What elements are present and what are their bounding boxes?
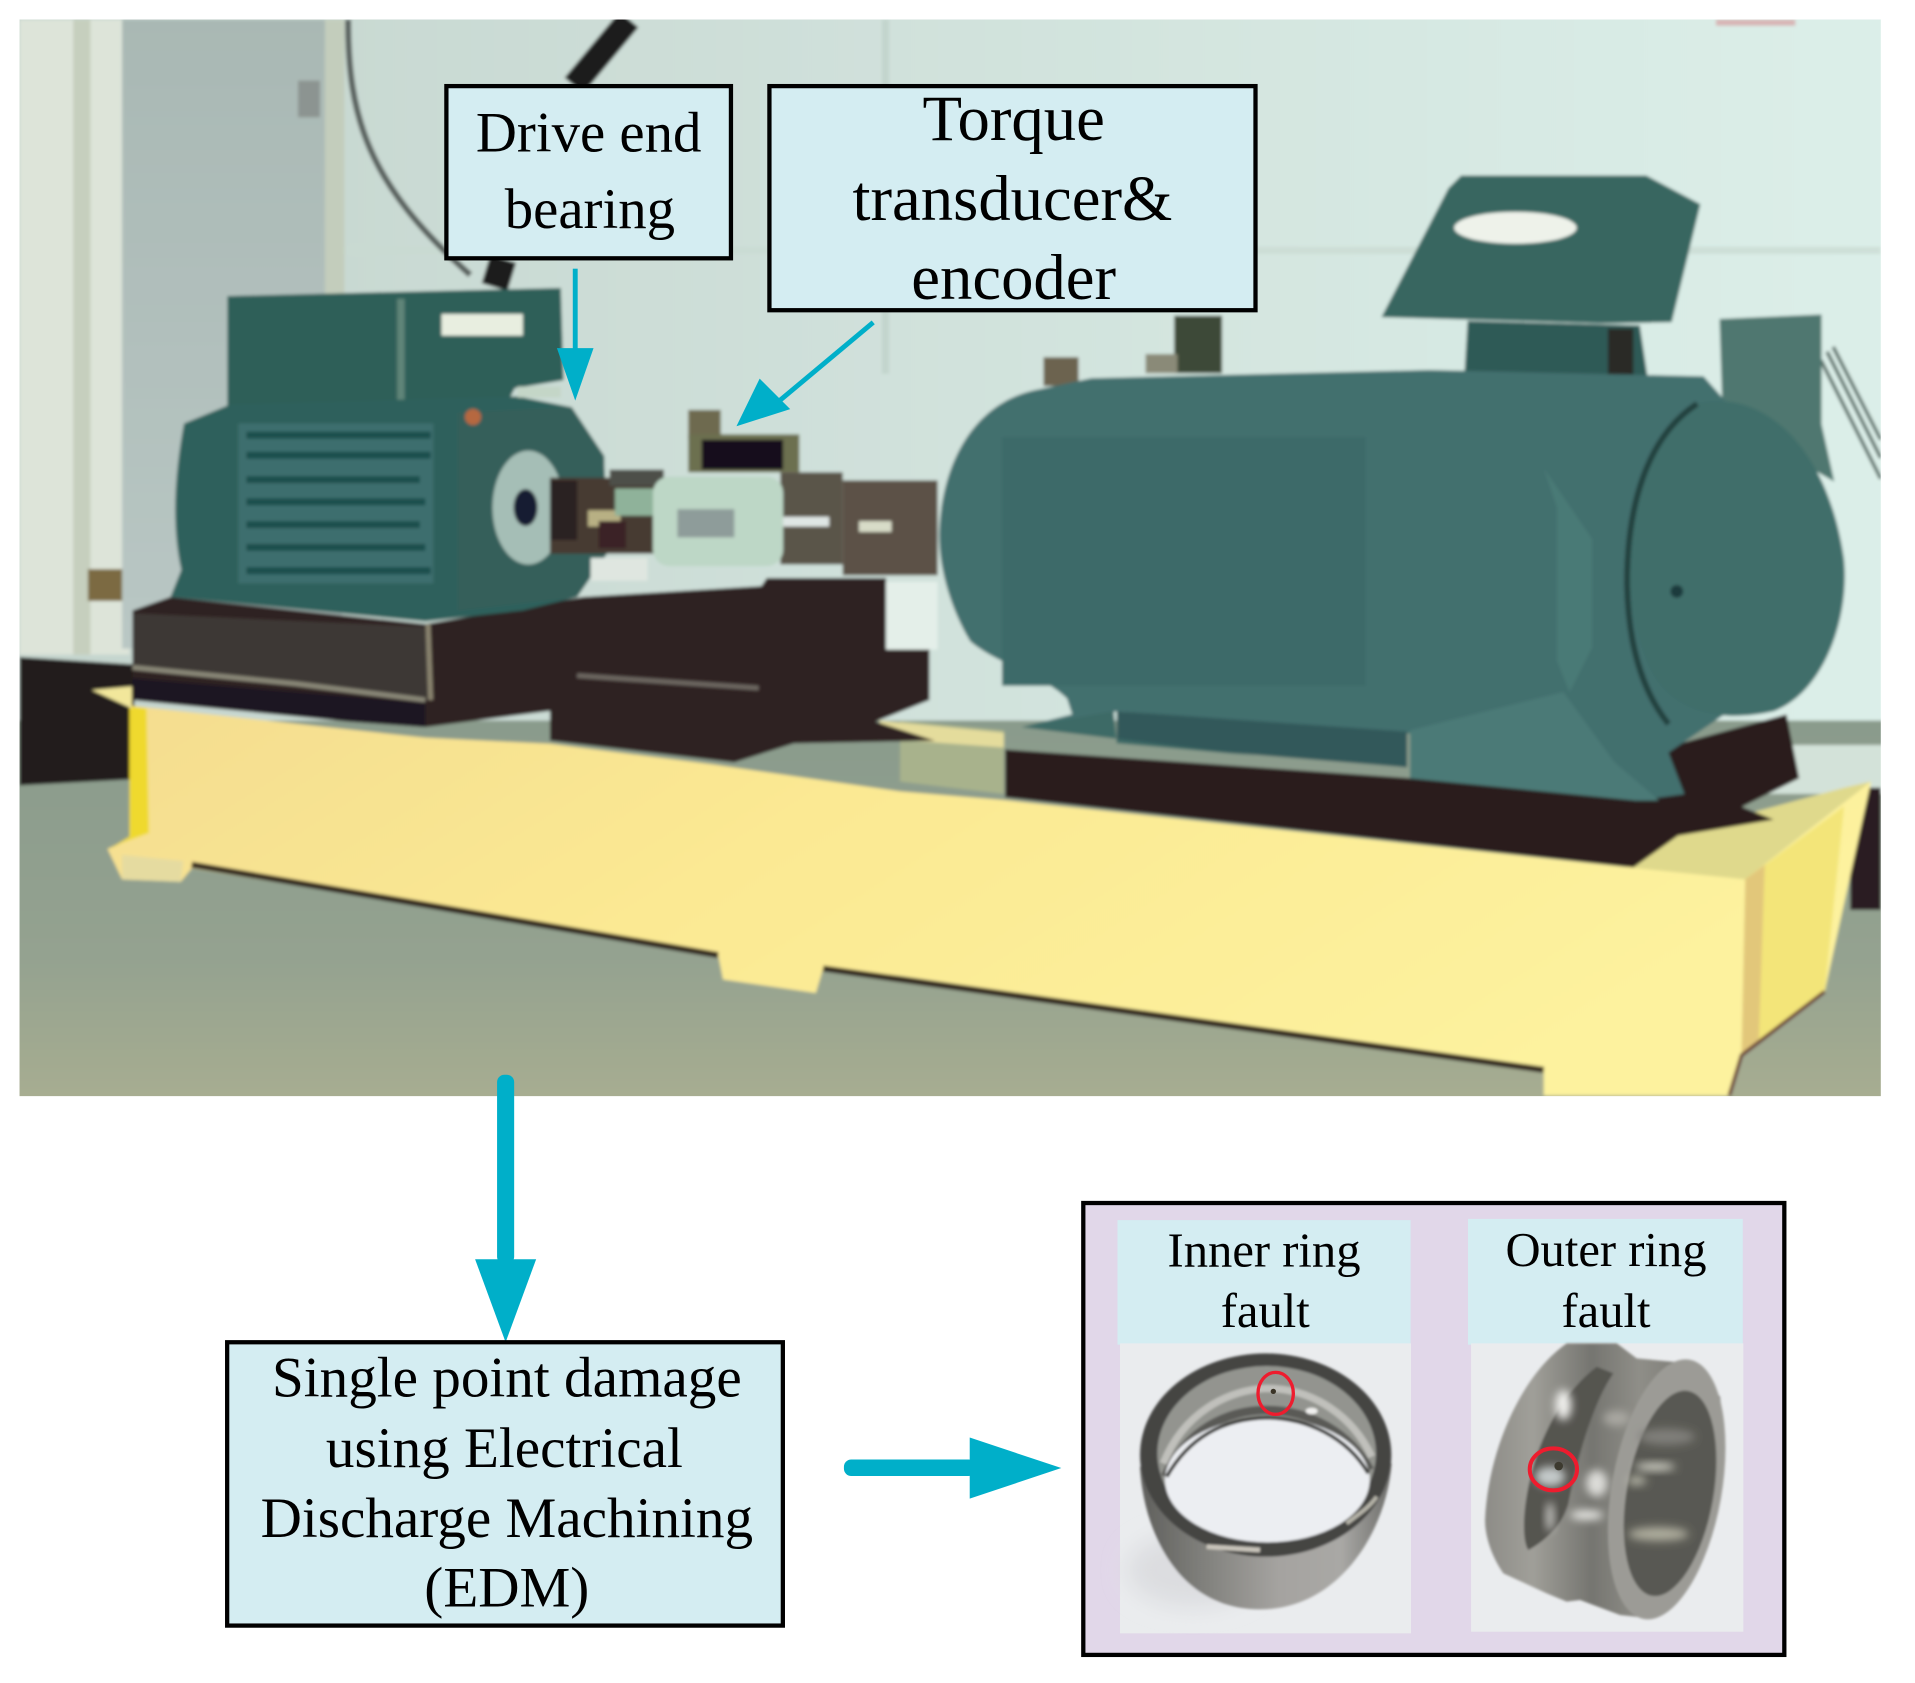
photo: inner ring bearing xyxy=(1120,1343,1411,1633)
main body xyxy=(939,370,1729,801)
arrow: to torque transducer xyxy=(736,322,873,426)
motor body xyxy=(170,396,607,621)
right motor base xyxy=(1005,714,1799,867)
box: single point damage using EDM: using Electrical xyxy=(326,1417,683,1480)
label box: drive end bearing: Drive end xyxy=(476,101,701,164)
label: outer ring fault: fault xyxy=(1561,1284,1651,1338)
terminal box xyxy=(227,288,564,407)
label box: torque transducer and encoder: encoder xyxy=(911,241,1116,313)
end flange xyxy=(458,407,607,611)
label box: drive end bearing xyxy=(446,86,731,258)
wall background xyxy=(20,20,1881,724)
top stubs xyxy=(1043,316,1222,386)
panel: bearing fault samples xyxy=(1083,1203,1784,1655)
fault marker: outer ring xyxy=(1530,1448,1577,1490)
box: single point damage using EDM: Discharge Machining xyxy=(261,1487,753,1550)
motor base xyxy=(133,578,935,762)
yellow wooden base xyxy=(92,686,1871,1096)
arrow: photo to EDM box xyxy=(475,1075,536,1342)
label: inner ring fault: Inner ring xyxy=(1168,1224,1361,1278)
right end bell xyxy=(1722,402,1847,718)
cooling fins xyxy=(246,432,431,574)
photo: outer ring bearing xyxy=(1471,1343,1744,1632)
arrow: EDM to fault samples xyxy=(844,1438,1061,1499)
label box: torque transducer and encoder: transducer& xyxy=(853,162,1172,234)
fault marker: inner ring xyxy=(1258,1372,1293,1414)
box: single point damage using EDM: (EDM) xyxy=(424,1557,589,1620)
label box: drive end bearing: bearing xyxy=(505,178,675,241)
cables xyxy=(348,20,1881,479)
air pipe xyxy=(1720,315,1834,482)
label: inner ring fault xyxy=(1117,1220,1411,1345)
arrow: to drive end bearing xyxy=(557,269,594,401)
box: single point damage using EDM xyxy=(227,1342,783,1626)
label box: torque transducer and encoder: Torque xyxy=(922,82,1105,154)
label: outer ring fault: Outer ring xyxy=(1505,1223,1707,1277)
right motor xyxy=(939,175,1845,867)
label: outer ring fault xyxy=(1468,1219,1743,1345)
shaft and torque transducer xyxy=(550,410,938,650)
floor xyxy=(0,657,1915,1111)
label: inner ring fault: fault xyxy=(1221,1284,1310,1338)
photo: motor test rig xyxy=(0,0,1915,1111)
label box: torque transducer and encoder xyxy=(769,82,1255,313)
left motor xyxy=(133,288,935,762)
terminal box xyxy=(1381,175,1700,323)
box: single point damage using EDM: Single point damage xyxy=(272,1347,742,1410)
